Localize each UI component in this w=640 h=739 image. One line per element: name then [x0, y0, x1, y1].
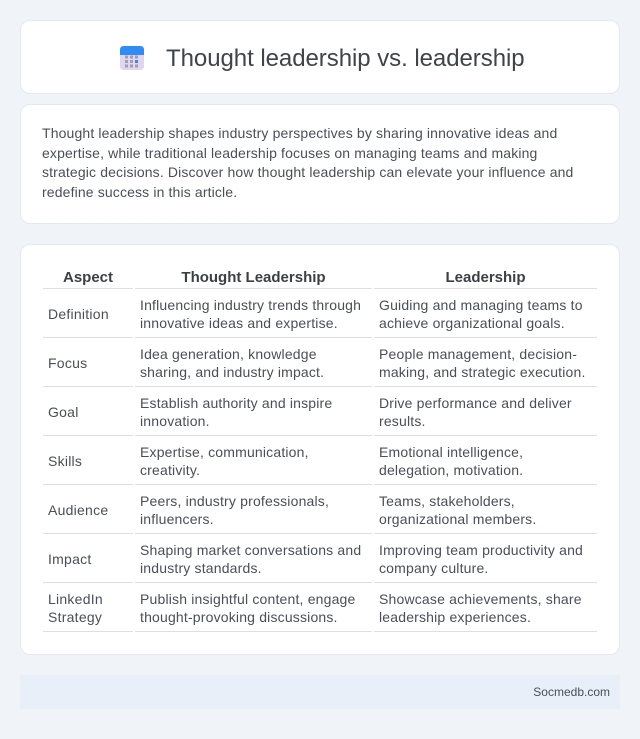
LinkedIn Strategy: leadership: leadership experiences.	[379, 609, 531, 625]
Goal: leadership: Drive performance and deliver	[379, 395, 572, 411]
Goal: thought leadership	[140, 395, 332, 429]
footer bar	[20, 675, 620, 709]
Impact: leadership	[379, 542, 583, 576]
Definition: leadership: achieve organizational goals.	[379, 315, 565, 331]
Goal: thought leadership: Establish authority and inspire	[140, 395, 332, 411]
title: Thought leadership vs. leadership	[166, 45, 525, 72]
Definition: leadership	[379, 297, 583, 331]
Impact: thought leadership	[140, 542, 361, 576]
introduction text: redefine success in this article.	[42, 184, 237, 200]
Definition: thought leadership: Influencing industry trends through	[140, 297, 361, 313]
Goal: leadership: results.	[379, 413, 426, 429]
row: Definition: Definition	[48, 306, 109, 322]
panel: header	[20, 20, 620, 94]
Audience: leadership: Teams, stakeholders,	[379, 493, 515, 509]
row: Skills: Skills	[48, 453, 82, 469]
row: Impact: Impact	[48, 551, 92, 567]
Focus: leadership: making, and strategic execution.	[379, 364, 586, 380]
Focus: thought leadership: Idea generation, knowledge	[140, 346, 317, 362]
row: Goal: Goal	[48, 404, 79, 420]
Audience: leadership	[379, 493, 536, 527]
footer text: Socmedb.com	[533, 685, 610, 699]
Goal: thought leadership: innovation.	[140, 413, 210, 429]
table header: Thought Leadership: Thought Leadership	[181, 269, 326, 286]
Audience: leadership: organizational members.	[379, 511, 536, 527]
row: LinkedIn Strategy	[48, 591, 103, 625]
panel: introduction	[20, 104, 620, 224]
Definition: thought leadership	[140, 297, 361, 331]
Skills: thought leadership: Expertise, communication,	[140, 444, 309, 460]
Definition: leadership: Guiding and managing teams to	[379, 297, 583, 313]
Focus: thought leadership: sharing, and industry impact.	[140, 364, 324, 380]
Audience: thought leadership: influencers.	[140, 511, 214, 527]
Focus: leadership	[379, 346, 586, 380]
introduction text: expertise, while traditional leadership focuses on managing teams and making	[42, 144, 537, 160]
icon: calendar	[120, 46, 144, 70]
Focus: thought leadership	[140, 346, 324, 380]
row: LinkedIn Strategy: LinkedIn	[48, 591, 103, 607]
Focus: leadership: People management, decision-	[379, 346, 577, 362]
Skills: thought leadership	[140, 444, 309, 478]
Impact: leadership: company culture.	[379, 560, 488, 576]
introduction text: strategic decisions. Discover how thought leadership can elevate your influence and	[42, 164, 573, 180]
table header: Aspect: Aspect	[63, 269, 113, 286]
Skills: leadership: Emotional intelligence,	[379, 444, 523, 460]
LinkedIn Strategy: leadership: Showcase achievements, share	[379, 591, 582, 607]
LinkedIn Strategy: leadership	[379, 591, 582, 625]
Definition: thought leadership: innovative ideas and expertise.	[140, 315, 338, 331]
introduction text	[42, 125, 573, 200]
row: Focus: Focus	[48, 355, 87, 371]
panel: comparison table	[20, 244, 620, 655]
row: LinkedIn Strategy: Strategy	[48, 609, 102, 625]
introduction text: Thought leadership shapes industry perspectives by sharing innovative ideas and	[42, 125, 557, 141]
Audience: thought leadership: Peers, industry professionals,	[140, 493, 329, 509]
Impact: thought leadership: Shaping market conversations and	[140, 542, 361, 558]
Skills: thought leadership: creativity.	[140, 462, 200, 478]
LinkedIn Strategy: thought leadership	[140, 591, 356, 625]
row: Audience: Audience	[48, 502, 108, 518]
Impact: thought leadership: industry standards.	[140, 560, 262, 576]
Impact: leadership: Improving team productivity and	[379, 542, 583, 558]
Goal: leadership	[379, 395, 572, 429]
LinkedIn Strategy: thought leadership: Publish insightful content, engage	[140, 591, 356, 607]
Skills: leadership: delegation, motivation.	[379, 462, 523, 478]
Skills: leadership	[379, 444, 523, 478]
LinkedIn Strategy: thought leadership: thought-provoking discussions.	[140, 609, 338, 625]
Audience: thought leadership	[140, 493, 329, 527]
table header: Leadership: Leadership	[445, 269, 526, 286]
